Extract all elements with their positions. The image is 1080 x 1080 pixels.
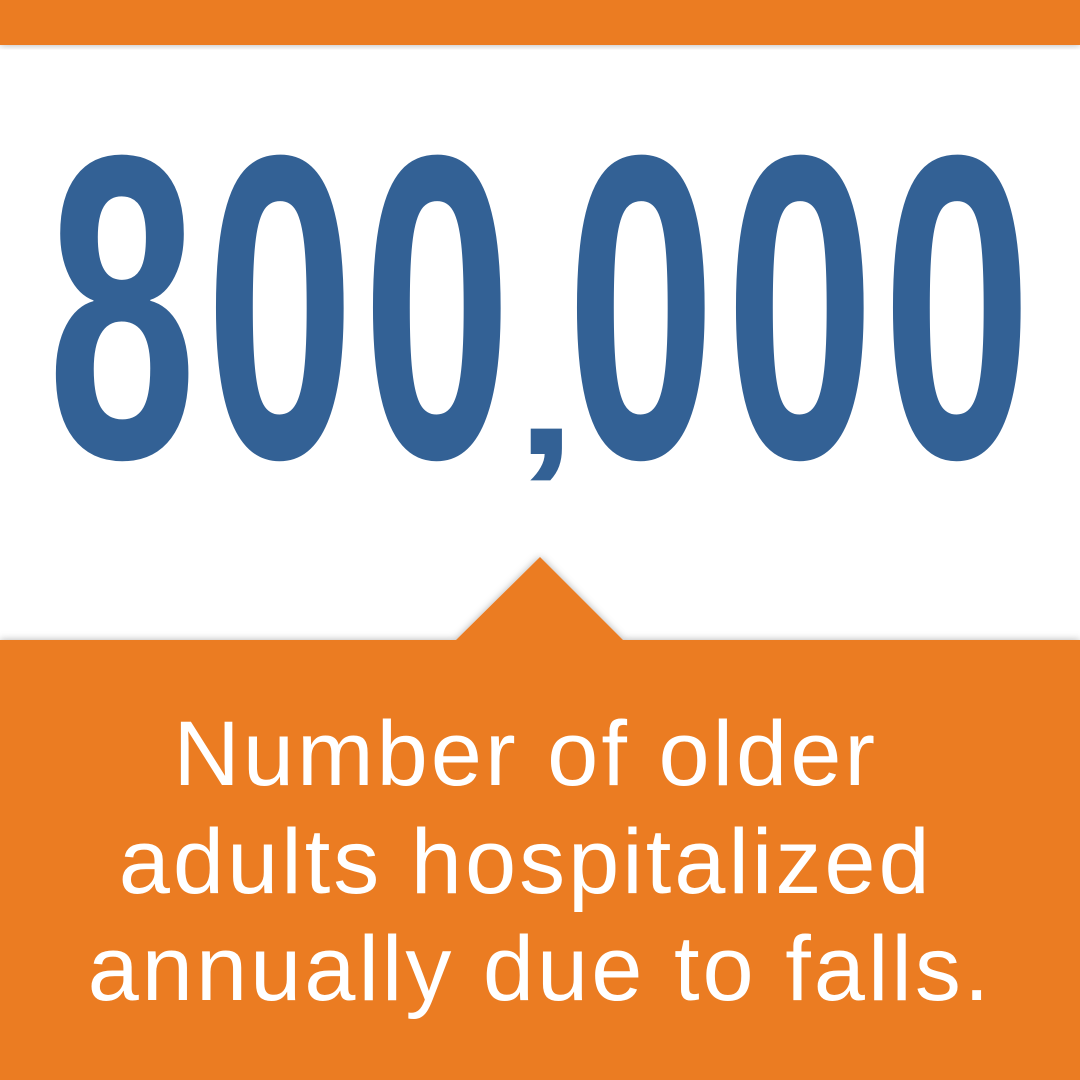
big number 800,000: 0 xyxy=(725,66,875,550)
callout text: Number of older xyxy=(173,703,878,805)
big number 800,000 xyxy=(47,66,1032,550)
callout text: annually due to falls. xyxy=(88,918,992,1020)
big number 800,000: 8 xyxy=(47,66,197,550)
top orange bar xyxy=(0,0,1080,45)
callout text: adults hospitalized xyxy=(119,811,933,913)
big number 800,000: 0 xyxy=(882,66,1032,550)
big number 800,000: 0 xyxy=(566,66,716,550)
big number 800,000: 0 xyxy=(362,66,512,550)
orange callout panel with pointer xyxy=(0,557,1080,1080)
big number 800,000: , xyxy=(515,301,577,490)
big number 800,000: 0 xyxy=(205,66,355,550)
